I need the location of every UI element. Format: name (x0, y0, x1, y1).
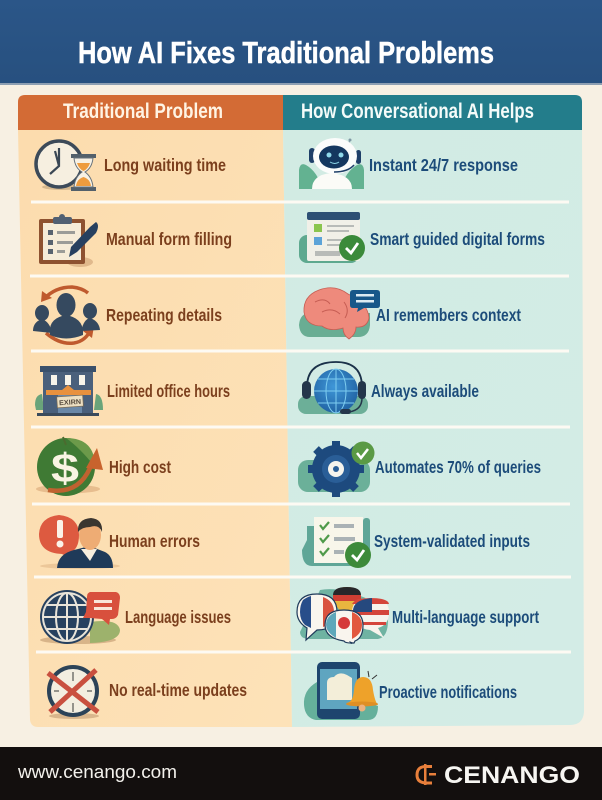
row 1 problem: long waiting time: Long waiting time (104, 155, 226, 175)
row 1 solution: instant response: Instant 24/7 response (369, 155, 518, 175)
row 4 solution: always available: Always available (371, 381, 479, 401)
row 5 problem: high cost: High cost (109, 457, 171, 477)
website url: www.cenango.com (17, 762, 177, 782)
row 3 problem: repeating details: Repeating details (106, 305, 222, 325)
row 8 solution: proactive notifications: Proactive notifications (379, 682, 517, 702)
icon: closed office building (35, 366, 103, 416)
footer bar (0, 747, 602, 800)
panel: traditional problem column (18, 130, 292, 727)
logo: cenango: CENANGO (444, 762, 580, 789)
panel: comparison table (18, 95, 584, 727)
icon: digital form with check (299, 212, 365, 263)
row 8 solution: proactive notifications (304, 662, 517, 720)
icon: alert bubble and person (39, 515, 120, 569)
icon: checklist with check badge (302, 517, 371, 568)
row 7 solution: multi-language support: Multi-language support (392, 607, 539, 627)
panel: conversational AI column (283, 130, 584, 727)
title: How AI Fixes Traditional Problems (78, 35, 494, 70)
icon: flag speech bubbles (297, 587, 389, 644)
icon: globe with speech bubble (40, 590, 120, 644)
row 7 solution: multi-language support (297, 587, 539, 644)
row 6 problem: human errors: Human errors (109, 531, 200, 551)
row 3 solution: AI remembers context: AI remembers context (376, 305, 521, 325)
column header: traditional problem: Traditional Problem (63, 100, 223, 123)
row 7 problem: language issues (40, 590, 231, 644)
row 6 solution: system validated inputs: System-validated inputs (374, 531, 530, 551)
header band (0, 0, 602, 85)
row 5 problem: high cost (36, 437, 171, 496)
icon: phone and bell (304, 662, 378, 720)
row 2 problem: manual form filling (39, 214, 232, 267)
row 4 problem: limited office hours: Limited office hours (107, 381, 230, 401)
row 4 solution: always available (298, 362, 479, 414)
row 8 problem: no real-time updates: No real-time updates (109, 680, 247, 700)
row 8 problem: no real-time updates (48, 667, 247, 719)
row 2 solution: smart forms: Smart guided digital forms (370, 229, 545, 249)
icon: clock and hourglass (36, 141, 96, 191)
icon: crossed-out clock (48, 667, 99, 719)
icon: dollar coin with up arrow: $ (51, 445, 79, 491)
row 1 problem: long waiting time (36, 141, 226, 191)
icon: robot (299, 138, 364, 189)
row 2 problem: manual form filling: Manual form filling (106, 229, 232, 249)
row 6 solution: system validated inputs (302, 517, 530, 568)
row 1 solution: instant response (299, 138, 518, 189)
row 4 problem: limited office hours (35, 366, 230, 416)
icon: clipboard and pen (39, 214, 98, 267)
icon: brain with chat bubble (299, 288, 380, 339)
row 2 solution: smart forms (299, 212, 545, 263)
icon: globe with headset (298, 362, 368, 414)
column header: how conversational AI helps: How Conversational AI Helps (301, 100, 534, 123)
icon: closed office building: EXIRN (59, 399, 81, 407)
column header: how conversational AI helps (283, 95, 582, 130)
row 3 solution: AI remembers context (299, 288, 521, 339)
column header: traditional problem (18, 95, 283, 130)
row 3 problem: repeating details (33, 287, 222, 343)
row 5 solution: automates queries (298, 441, 541, 497)
row 7 problem: language issues: Language issues (125, 607, 231, 627)
icon: people with cycle arrows (33, 287, 100, 343)
row 6 problem: human errors (39, 515, 200, 569)
row 5 solution: automates queries: Automates 70% of queries (375, 457, 541, 477)
icon: gear with check (298, 441, 374, 497)
